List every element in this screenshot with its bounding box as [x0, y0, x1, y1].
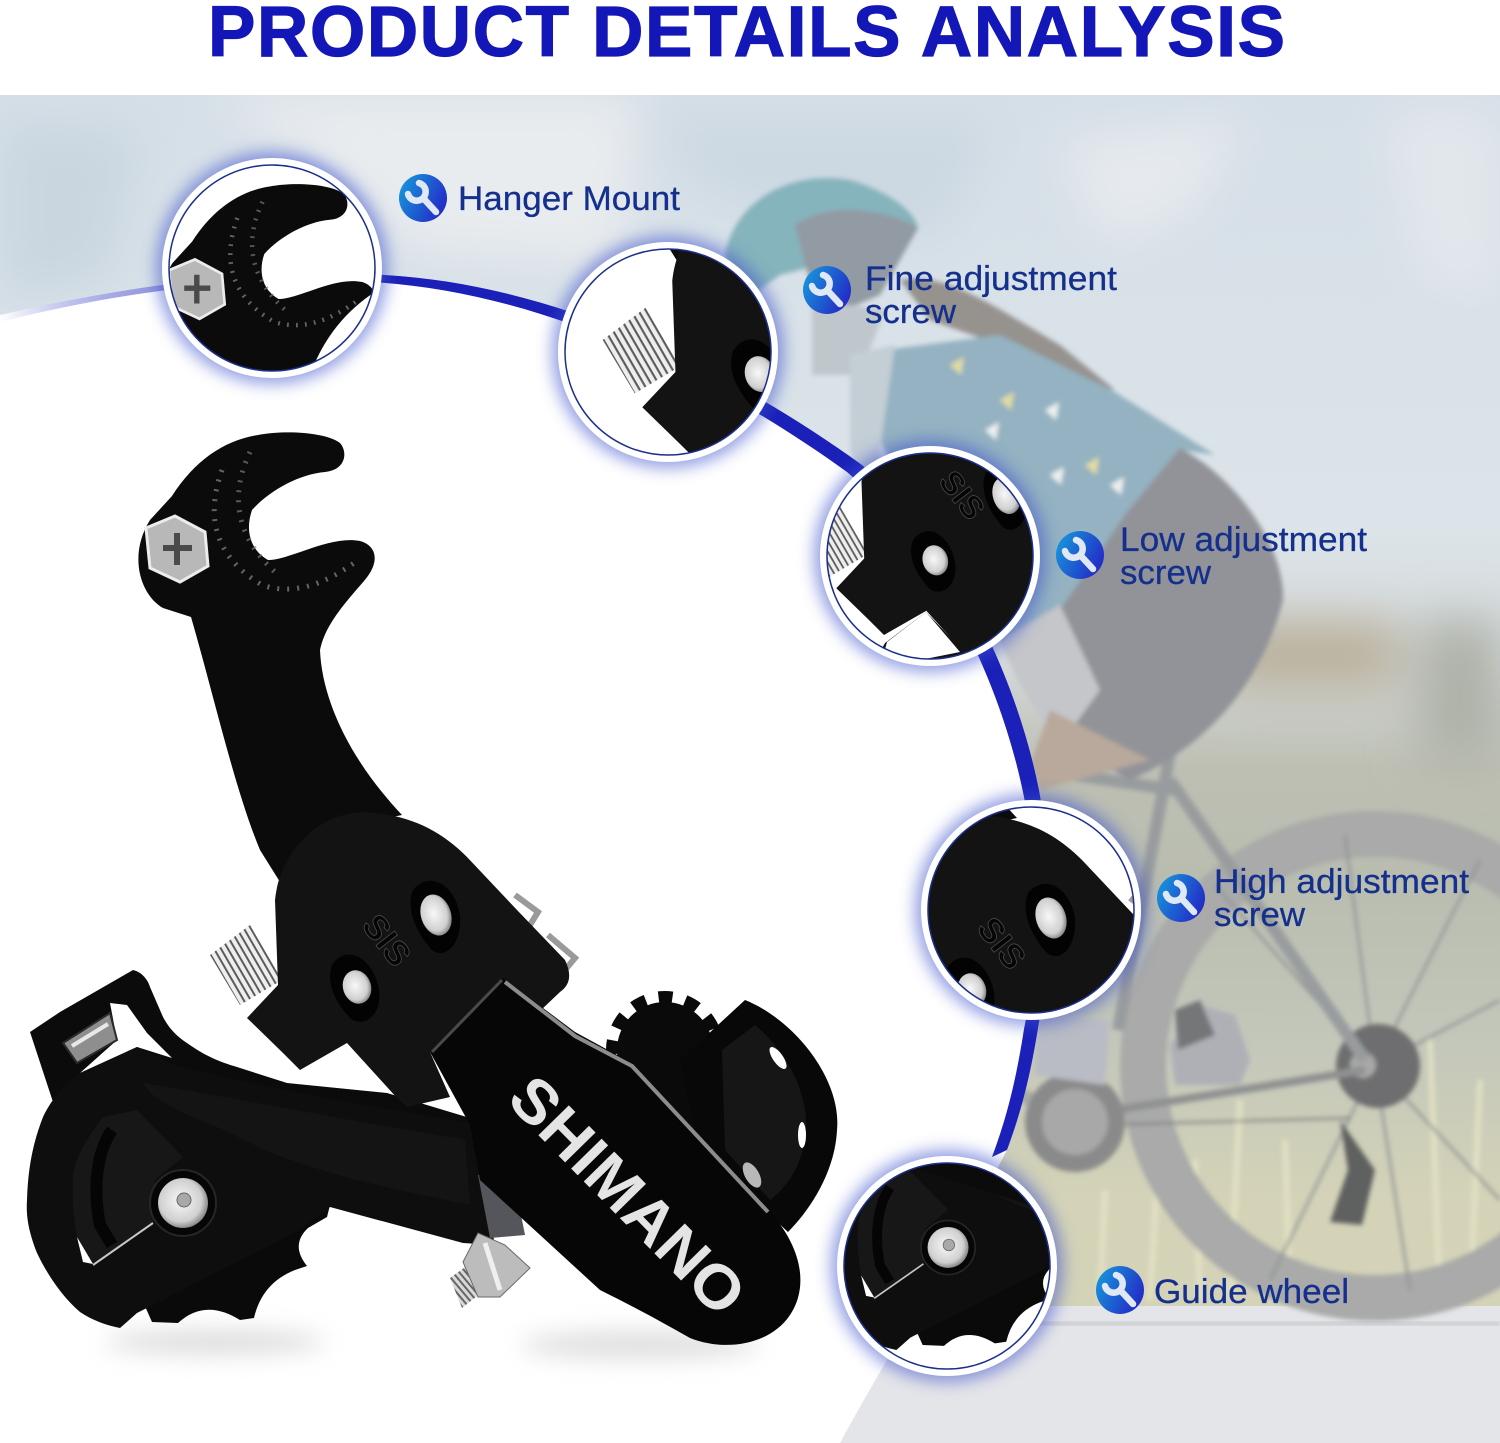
icon: wrench, fine adjustment: [803, 266, 851, 314]
detail circle: hanger mount: [146, 142, 398, 395]
label: guide wheel: Guide wheel: [1154, 1273, 1349, 1311]
product shadow: [105, 1331, 760, 1359]
detail circle: guide wheel: [820, 1139, 1073, 1392]
detail circle: high adjustment screw: SIS: [969, 910, 1033, 977]
detail circle: low adjustment screw: SIS: [932, 464, 992, 526]
detail circle: fine adjustment screw: [541, 226, 794, 479]
label: fine adjustment screw: [865, 260, 1118, 331]
white circular area: [0, 273, 1049, 1443]
SIS mark on cover: SIS: [354, 907, 418, 974]
icon: wrench, low adjustment: [1056, 531, 1104, 579]
label: high adjustment screw: screw: [1214, 896, 1305, 934]
icon: wrench, hanger mount: [399, 174, 447, 222]
detail circle: high adjustment screw: [904, 784, 1156, 1036]
detail circle: low adjustment screw: [803, 432, 1054, 683]
icon: wrench, high adjustment: [1157, 874, 1205, 922]
label: low adjustment screw: screw: [1120, 554, 1211, 592]
label: fine adjustment screw: Fine adjustment: [865, 260, 1118, 298]
label: high adjustment screw: High adjustment: [1214, 863, 1470, 901]
icon: wrench, guide wheel: [1096, 1266, 1144, 1314]
label: low adjustment screw: Low adjustment: [1120, 521, 1368, 559]
label: high adjustment screw: [1214, 863, 1470, 934]
SHIMANO logo text: SHIMANO: [495, 1063, 759, 1329]
blue arc line: [0, 273, 1049, 1157]
label: low adjustment screw: [1120, 521, 1368, 592]
label: fine adjustment screw: screw: [865, 293, 956, 331]
label: hanger mount: Hanger Mount: [458, 180, 681, 218]
product: rear derailleur: [27, 432, 837, 1345]
